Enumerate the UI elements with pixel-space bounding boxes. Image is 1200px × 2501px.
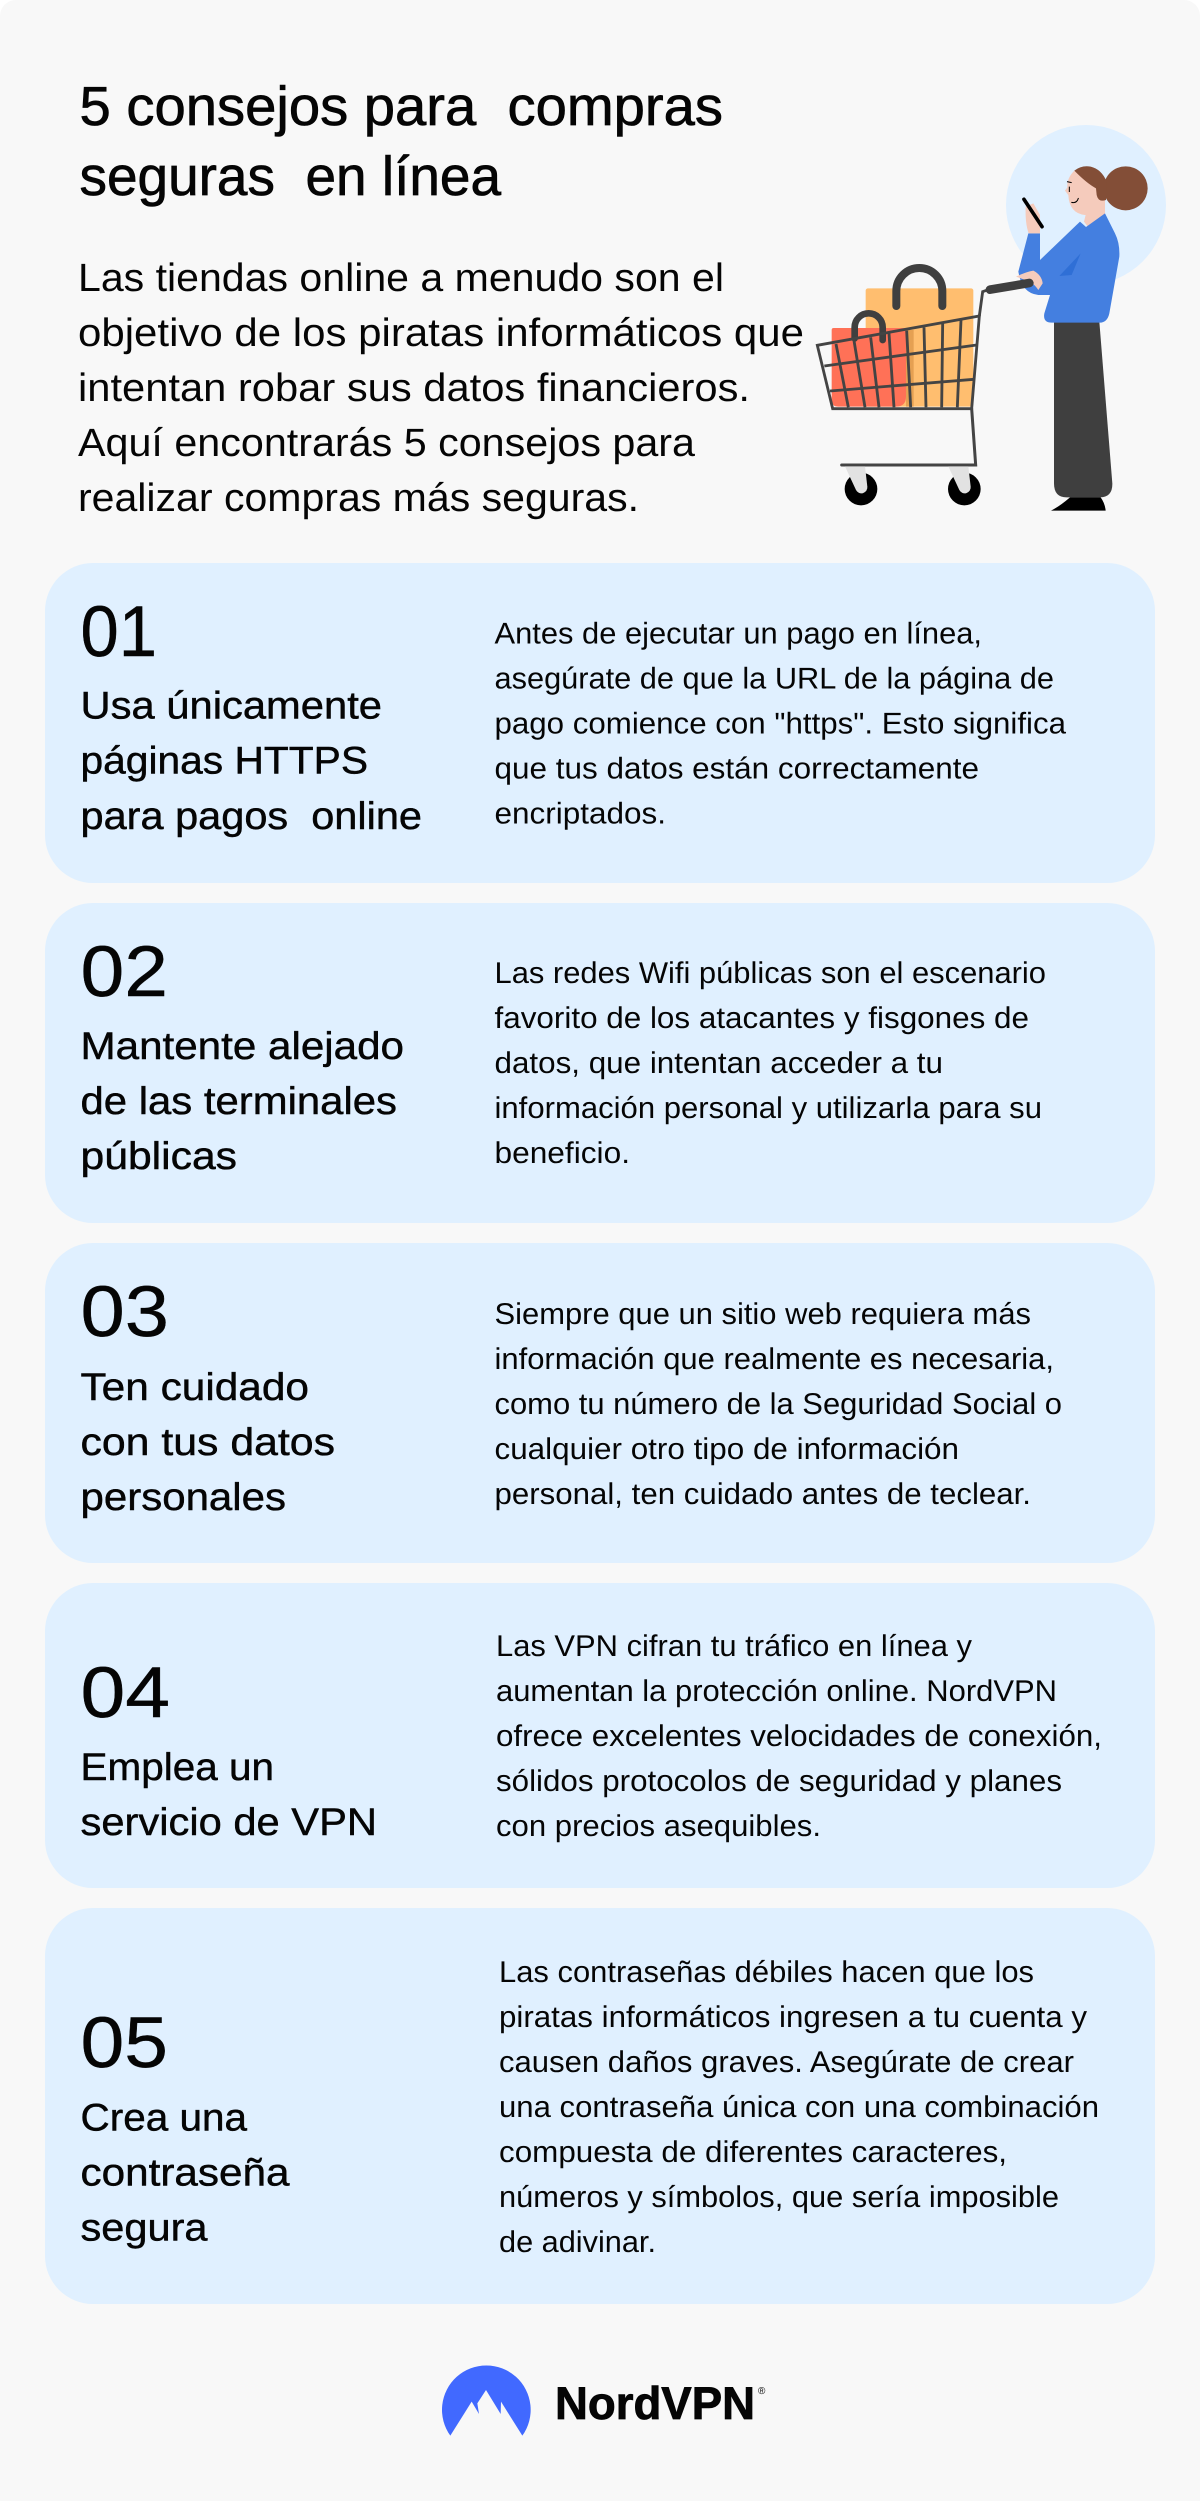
heading: tip 02: de las terminales <box>80 1080 397 1123</box>
body: tip 05: números y símbolos, que sería imposible <box>499 2181 1059 2214</box>
intro text: objetivo de los piratas informáticos que <box>78 311 804 355</box>
number 02: 02 <box>80 932 168 1012</box>
logo: NordVPN <box>442 2365 766 2436</box>
number 05: 05 <box>80 2003 168 2083</box>
heading: tip 01: para pagos online <box>80 795 422 838</box>
body: tip 01: que tus datos están correctamente <box>494 752 979 786</box>
number 01: 01 <box>80 592 157 672</box>
body: tip 05: una contraseña única con una combinación <box>499 2091 1099 2124</box>
heading: tip 04: Emplea un <box>80 1746 274 1789</box>
body: tip 03: Siempre que un sitio web requiera más <box>494 1298 1031 1331</box>
icon: orange shopping bag <box>866 268 973 407</box>
body: tip 05: de adivinar. <box>499 2226 656 2259</box>
body: tip 05: Las contraseñas débiles hacen que los <box>499 1956 1034 1989</box>
body: tip 01: encriptados. <box>494 798 666 830</box>
body: tip 02: favorito de los atacantes y fisgones de <box>494 1002 1029 1035</box>
heading: tip 01: Usa únicamente <box>80 684 382 728</box>
heading: tip 02: Mantente alejado <box>80 1025 404 1068</box>
heading: tip 05: segura <box>80 2206 208 2250</box>
intro text: intentan robar sus datos financieros. <box>78 366 750 410</box>
heading: tip 04: servicio de VPN <box>80 1801 377 1844</box>
heading: tip 03: con tus datos <box>80 1421 335 1464</box>
body: tip 04: Las VPN cifran tu tráfico en línea y <box>496 1630 972 1663</box>
body: tip 05: causen daños graves. Asegúrate de crear <box>499 2046 1074 2079</box>
body: tip 03: como tu número de la Seguridad Social o <box>494 1388 1062 1421</box>
body: tip 01: asegúrate de que la URL de la página de <box>494 662 1054 696</box>
body: tip 01: Antes de ejecutar un pago en línea, <box>494 618 982 650</box>
icon: mountain in blue circle <box>442 2365 531 2436</box>
panel: tip 04 <box>45 1583 1155 1888</box>
heading: tip 02: públicas <box>80 1135 237 1178</box>
illustration: woman with shopping cart <box>817 125 1166 511</box>
intro text: realizar compras más seguras. <box>78 476 639 520</box>
body: tip 02: Las redes Wifi públicas son el escenario <box>494 957 1046 990</box>
intro text: Las tiendas online a menudo son el <box>78 256 724 300</box>
registered mark: ® <box>758 2386 766 2397</box>
panel: tip 03 <box>45 1243 1155 1563</box>
heading: tip 01: páginas HTTPS <box>80 740 368 782</box>
title <box>80 75 723 207</box>
number 03: 03 <box>80 1272 169 1352</box>
heading: tip 03 <box>80 1366 335 1519</box>
body: tip 01 <box>494 618 1066 830</box>
icon: cart handle <box>990 283 1029 290</box>
body: tip 02: datos, que intentan acceder a tu <box>494 1047 943 1080</box>
icon: red shopping bag <box>832 313 906 407</box>
body: tip 04: aumentan la protección online. NordVPN <box>496 1675 1057 1708</box>
body: tip 03: cualquier otro tipo de información <box>494 1433 959 1466</box>
heading: tip 05 <box>80 2096 290 2250</box>
body: tip 03: personal, ten cuidado antes de teclear. <box>494 1478 1031 1511</box>
title: seguras en línea <box>80 145 501 207</box>
icon: cart <box>817 289 989 505</box>
panel: tip 01 <box>45 563 1155 883</box>
body: tip 02 <box>494 957 1046 1170</box>
wordmark: NordVPN <box>555 2377 755 2429</box>
body: tip 05: piratas informáticos ingresen a tu cuenta y <box>499 2001 1087 2034</box>
intro text: Aquí encontrarás 5 consejos para <box>78 421 695 465</box>
heading: tip 05: Crea una <box>80 2096 248 2140</box>
body: tip 04 <box>496 1630 1102 1843</box>
heading: tip 02 <box>80 1025 404 1178</box>
body: tip 03: información que realmente es necesaria, <box>494 1343 1054 1376</box>
intro text <box>78 256 804 520</box>
number 04: 04 <box>80 1653 170 1733</box>
heading: tip 03: personales <box>80 1476 286 1519</box>
body: tip 05: compuesta de diferentes caracteres, <box>499 2136 1007 2169</box>
icon: woman <box>1016 166 1148 511</box>
body: tip 02: beneficio. <box>494 1137 630 1170</box>
heading: tip 03: Ten cuidado <box>80 1366 309 1409</box>
body: tip 04: ofrece excelentes velocidades de conexión, <box>496 1720 1102 1753</box>
body: tip 04: con precios asequibles. <box>496 1810 821 1843</box>
body: tip 02: información personal y utilizarla para su <box>494 1092 1042 1125</box>
body: tip 01: pago comience con "https". Esto significa <box>494 708 1066 740</box>
heading: tip 01 <box>80 684 422 838</box>
panel: tip 02 <box>45 903 1155 1223</box>
body: tip 03 <box>494 1298 1062 1511</box>
heading: tip 05: contraseña <box>80 2152 290 2194</box>
panel: tip 05 <box>45 1908 1155 2304</box>
heading: tip 04 <box>80 1746 377 1844</box>
title: 5 consejos para compras <box>80 75 723 137</box>
body: tip 05 <box>499 1956 1099 2259</box>
body: tip 04: sólidos protocolos de seguridad y planes <box>496 1765 1062 1798</box>
